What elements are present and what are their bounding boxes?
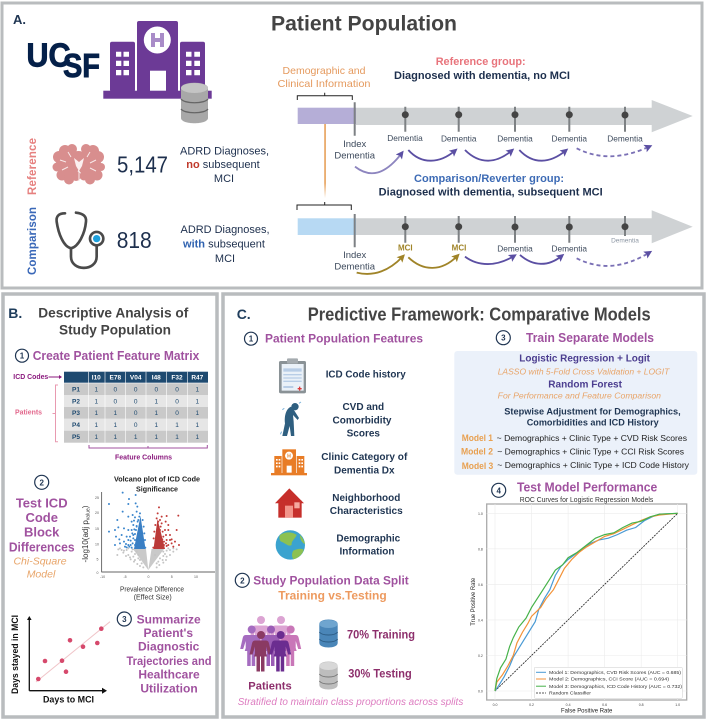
step 3 badge bbox=[117, 612, 131, 626]
heading: summarize trajectories: Patient's bbox=[144, 626, 193, 640]
text: ICD code history: ICD Code history bbox=[326, 369, 406, 380]
heading: reference group: Reference group: bbox=[436, 56, 526, 68]
timeline: reference: Dementia bbox=[552, 134, 587, 144]
section 1 badge: 1 bbox=[249, 335, 254, 344]
timeline: comparison: Index bbox=[343, 250, 367, 261]
chart: volcano plot: -5 bbox=[124, 575, 127, 579]
chart: volcano plot: 10 bbox=[194, 575, 198, 579]
table: patient feature matrix: P3 bbox=[72, 410, 80, 417]
chart: ROC curves: 1.0 bbox=[478, 512, 483, 516]
chart: volcano plot: ) bbox=[81, 505, 90, 508]
text: ADRD with MCI bbox=[180, 224, 270, 265]
step 2 badge bbox=[35, 475, 49, 489]
panel C: predictive framework bbox=[223, 294, 704, 717]
chart: ROC curves: 0.0 bbox=[493, 703, 497, 707]
chart: ROC curves: 0.4 bbox=[566, 703, 571, 707]
text: ADRD with MCI: ADRD Diagnoses, bbox=[180, 224, 270, 236]
chart: ROC curves: 0.8 bbox=[478, 547, 483, 551]
heading: summarize trajectories bbox=[126, 612, 212, 696]
section 1 badge bbox=[244, 332, 258, 345]
table: patient feature matrix: P2 bbox=[72, 398, 80, 405]
heading: descriptive analysis: Descriptive Analysis of bbox=[38, 304, 189, 320]
table: patient feature matrix: 1 bbox=[113, 434, 117, 441]
timeline: reference: Dementia bbox=[387, 133, 423, 143]
arrows: comparison group visits bbox=[357, 253, 649, 274]
icon: clipboard bbox=[279, 358, 306, 393]
table: patient feature matrix: 0 bbox=[113, 386, 117, 394]
heading: reference group: Diagnosed with dementia, no MCI bbox=[394, 70, 570, 82]
table: patient feature matrix: 1 bbox=[94, 422, 98, 429]
heading: summarize trajectories: Summarize bbox=[137, 612, 201, 626]
chart: ROC curves: True Positive Rate bbox=[470, 577, 477, 626]
chart: volcano plot: 5 bbox=[96, 558, 98, 562]
table: patient feature matrix: 1 bbox=[195, 386, 199, 394]
text: neighborhood characteristics: Neighborhood bbox=[332, 493, 400, 504]
text: clinic category: Dementia Dx bbox=[334, 465, 395, 476]
text: CVD and comorbidity scores: Comorbidity bbox=[332, 415, 392, 426]
table: patient feature matrix: 0 bbox=[175, 386, 179, 394]
section 4 badge: 4 bbox=[496, 486, 501, 495]
table: patient feature matrix: 1 bbox=[154, 398, 158, 405]
icon: patients group bbox=[240, 616, 301, 672]
icon: house bbox=[275, 488, 304, 518]
panel B: descriptive analysis bbox=[3, 294, 217, 717]
table: patient feature matrix: 1 bbox=[195, 398, 199, 405]
chart: volcano plot: 5 bbox=[171, 575, 173, 579]
chart: ROC curves: Model 2: Demographics, CCI Score (AUC = 0.694) bbox=[549, 677, 669, 683]
icon: clinic building bbox=[271, 449, 307, 475]
heading: test ICD code block differences: Test ICD bbox=[16, 495, 68, 510]
label: Reference: Reference bbox=[27, 138, 39, 195]
text: 70% training: 70% Training bbox=[347, 627, 415, 641]
note: stratified: Stratified to maintain class proportions across splits bbox=[238, 697, 463, 708]
table: patient feature matrix: I48 bbox=[152, 375, 161, 382]
chart: ROC curves: Model 1: Demographics, CVD Risk Scores (AUC = 0.685) bbox=[549, 670, 681, 676]
chart: volcano plot: 0 bbox=[148, 575, 150, 579]
table: patient feature matrix: 1 bbox=[154, 422, 158, 429]
chart: volcano plot: Prevalence Difference bbox=[120, 587, 184, 594]
step 1 badge bbox=[16, 349, 28, 362]
timeline: reference: Dementia bbox=[441, 134, 477, 144]
chart: volcano plot: 15 bbox=[95, 527, 99, 531]
chart: volcano plot: Volcano plot of ICD Code bbox=[114, 477, 200, 484]
icon: database blue bbox=[319, 620, 338, 648]
panel: model definitions: ~ Demographics + Clinic Type + ICD Code History bbox=[497, 460, 690, 470]
table: patient feature matrix: R47 bbox=[191, 375, 204, 382]
heading: test ICD code block differences: Code bbox=[25, 510, 58, 525]
panel B label: B. bbox=[8, 305, 22, 321]
chart: ROC curves: Random Classifier bbox=[549, 691, 591, 697]
heading: patient population features: Patient Population Features bbox=[265, 332, 423, 346]
chart: ROC curves: 1.0 bbox=[675, 703, 680, 707]
text: ADRD no MCI bbox=[180, 145, 269, 185]
panel: model definitions: ~ Demographics + Clinic Type + CVD Risk Scores bbox=[497, 433, 687, 443]
text: demographic information: Demographic bbox=[336, 533, 401, 544]
heading: study population data split: Training vs.Testing bbox=[278, 588, 387, 602]
text: ADRD with MCI: MCI bbox=[215, 253, 235, 265]
chart: volcano plot: 10 bbox=[95, 542, 99, 546]
heading: test ICD code block differences bbox=[9, 495, 75, 554]
timeline: reference bbox=[298, 100, 693, 162]
label: feature columns brace: Feature Columns bbox=[115, 454, 172, 461]
chart: ROC curves: 0.6 bbox=[602, 703, 607, 707]
text: CVD and comorbidity scores: Scores bbox=[347, 429, 380, 440]
text: clinic category bbox=[321, 452, 408, 476]
label: ICD codes: ICD Codes bbox=[13, 374, 48, 381]
table: patient feature matrix bbox=[64, 372, 208, 443]
table: patient feature matrix: E78 bbox=[110, 375, 121, 382]
text: CVD and comorbidity scores bbox=[332, 402, 392, 440]
text: demographic information: Information bbox=[340, 547, 394, 558]
text: ADRD no MCI: MCI bbox=[214, 173, 234, 185]
text: ADRD no MCI: ADRD Diagnoses, bbox=[180, 145, 269, 157]
table: patient feature matrix: 1 bbox=[195, 434, 199, 441]
panel A: patient population bbox=[2, 3, 702, 288]
chart: volcano plot: Significance bbox=[136, 487, 178, 494]
timeline: reference: Dementia bbox=[497, 134, 533, 144]
section 4 badge bbox=[492, 483, 506, 497]
heading: reference group bbox=[394, 56, 570, 82]
UCSF logo: SF bbox=[63, 47, 100, 84]
table: patient feature matrix: 1 bbox=[154, 410, 158, 417]
panel: model definitions: For Performance and Feature Comparison bbox=[498, 391, 661, 401]
chart: volcano plot: -10 bbox=[100, 575, 105, 579]
chart: days scatter: Days to MCI bbox=[43, 695, 94, 706]
heading: comparison group bbox=[379, 173, 603, 199]
heading: summarize trajectories: Healthcare bbox=[138, 668, 200, 682]
text: ADRD with MCI: with subsequent bbox=[182, 238, 265, 250]
timeline: comparison: Dementia bbox=[497, 244, 533, 254]
icon: hunched person bbox=[280, 402, 301, 436]
chart: volcano plot: -log10(adj p bbox=[81, 520, 90, 562]
chart: ROC curves: 0.8 bbox=[639, 703, 644, 707]
chart: volcano plot: (Effect Size) bbox=[134, 594, 172, 601]
panel: model definitions: Random Forest bbox=[548, 379, 622, 391]
panel: model definitions: Logistic Regression + Logit bbox=[519, 352, 650, 364]
text: neighborhood characteristics: Characteristics bbox=[330, 506, 403, 517]
timeline: comparison: Dementia bbox=[334, 262, 376, 273]
panel C label: C. bbox=[237, 306, 251, 322]
timeline: reference: Index bbox=[343, 139, 367, 150]
panel: model definitions: Comorbidities and ICD History bbox=[527, 417, 659, 428]
table: patient feature matrix: 0 bbox=[154, 386, 158, 394]
arrows: reference group visits bbox=[355, 147, 649, 173]
panel: model definitions: LASSO with 5-Fold Cross Validation + LOGIT bbox=[498, 366, 670, 376]
text: chi-square model bbox=[13, 555, 67, 580]
text: 30% testing: 30% Testing bbox=[348, 666, 412, 680]
label: patients brace: Patients bbox=[15, 410, 42, 417]
panel: model definitions bbox=[454, 351, 697, 475]
heading: study population data split: Study Population Data Split bbox=[253, 573, 409, 587]
text: ADRD no MCI: no subsequent bbox=[186, 159, 260, 171]
section 3 badge: 3 bbox=[501, 334, 506, 343]
text: CVD and comorbidity scores: CVD and bbox=[342, 402, 384, 413]
table: patient feature matrix: 0 bbox=[134, 398, 138, 405]
heading: comparison group: Comparison/Reverter group: bbox=[414, 173, 564, 185]
heading: summarize trajectories: Utilization bbox=[140, 682, 198, 696]
label: demographic and clinical information bbox=[278, 65, 371, 90]
icon: brain bbox=[52, 144, 105, 184]
step 1 badge: 1 bbox=[20, 352, 25, 361]
heading: study population data split bbox=[253, 573, 409, 602]
timeline: reference: Dementia bbox=[334, 150, 376, 162]
icon: hospital bbox=[103, 21, 212, 99]
chart: ROC curves: 0.2 bbox=[478, 654, 483, 658]
table: patient feature matrix: 0 bbox=[134, 386, 138, 394]
icon: database bbox=[181, 83, 208, 123]
label: patients: Patients bbox=[248, 680, 292, 692]
panel: model definitions: Model 3 bbox=[462, 461, 493, 471]
title: predictive framework: Predictive Framework: Comparative Models bbox=[308, 305, 651, 325]
table: patient feature matrix: 0 bbox=[175, 410, 179, 417]
label: demographic and clinical information: Demographic and bbox=[282, 65, 366, 77]
table: patient feature matrix: I10 bbox=[92, 375, 101, 382]
chart: ROC curves: 0.2 bbox=[529, 703, 534, 707]
panel: model definitions: Stepwise Adjustment for Demographics, bbox=[504, 406, 681, 417]
UCSF logo bbox=[26, 36, 100, 84]
text: clinic category: Clinic Category of bbox=[321, 452, 408, 463]
count: 818: 818 bbox=[117, 227, 152, 253]
chart: days scatter bbox=[10, 615, 110, 706]
table: patient feature matrix: 0 bbox=[134, 422, 138, 429]
bracket: top bbox=[297, 93, 352, 100]
chart: volcano plot: 0 bbox=[96, 571, 98, 575]
step 3 badge: 3 bbox=[122, 615, 127, 624]
table: patient feature matrix: F32 bbox=[171, 375, 183, 382]
chart: volcano plot: value bbox=[86, 508, 92, 520]
table: patient feature matrix: P5 bbox=[72, 434, 80, 441]
heading: descriptive analysis bbox=[38, 304, 189, 337]
label: patients brace bbox=[15, 385, 58, 442]
section 2 badge bbox=[235, 573, 249, 587]
connector: orange line bbox=[324, 124, 326, 198]
heading: summarize trajectories: Trajectories and bbox=[126, 654, 212, 668]
table: patient feature matrix: 1 bbox=[195, 422, 199, 429]
text: neighborhood characteristics bbox=[330, 493, 403, 517]
panel A label: A. bbox=[13, 12, 26, 27]
chart: volcano plot: 20 bbox=[95, 511, 99, 515]
chart: ROC curves: Model 3: Demographics, ICD Code History (AUC = 0.732) bbox=[549, 684, 682, 690]
timeline: comparison: Dementia bbox=[611, 237, 639, 244]
timeline: comparison: MCI bbox=[452, 244, 466, 253]
chart: ROC curves: ROC Curves for Logistic Regression Models bbox=[520, 497, 654, 504]
table: patient feature matrix: 0 bbox=[175, 398, 179, 405]
table: patient feature matrix: 1 bbox=[154, 434, 158, 441]
icon: stethoscope bbox=[57, 213, 103, 268]
chart: ROC curves: False Positive Rate bbox=[561, 708, 613, 715]
table: patient feature matrix: V04 bbox=[130, 375, 142, 382]
title: Patient Population: Patient Population bbox=[271, 12, 457, 36]
table: patient feature matrix: 1 bbox=[134, 434, 138, 441]
table: patient feature matrix: 0 bbox=[113, 398, 117, 405]
icon: database gray bbox=[319, 662, 338, 690]
table: patient feature matrix: 1 bbox=[94, 410, 98, 417]
text: chi-square model: Chi-Square bbox=[13, 555, 67, 567]
step 2 badge: 2 bbox=[39, 478, 44, 487]
heading: test ICD code block differences: Block bbox=[24, 525, 60, 540]
label: Comparison: Comparison bbox=[27, 207, 39, 275]
table: patient feature matrix: 0 bbox=[134, 410, 138, 417]
label: demographic and clinical information: Clinical Information bbox=[278, 78, 371, 90]
heading: summarize trajectories: Diagnostic bbox=[138, 640, 200, 654]
text: demographic information bbox=[336, 533, 401, 558]
panel: model definitions: ~ Demographics + Clinic Type + CCI Risk Scores bbox=[497, 447, 684, 457]
label: feature columns brace bbox=[89, 445, 207, 461]
heading: test model performance: Test Model Performance bbox=[517, 480, 657, 495]
count: 5,147: 5,147 bbox=[117, 152, 168, 178]
table: patient feature matrix: P4 bbox=[72, 422, 80, 429]
section 2 badge: 2 bbox=[240, 576, 245, 585]
timeline: comparison: MCI bbox=[398, 244, 413, 253]
chart: ROC curves: 0.0 bbox=[478, 690, 483, 694]
section 3 badge bbox=[496, 331, 510, 345]
heading: comparison group: Diagnosed with dementia, subsequent MCI bbox=[379, 187, 603, 199]
timeline: comparison: Dementia bbox=[552, 244, 587, 254]
table: patient feature matrix: 1 bbox=[195, 410, 199, 417]
chart: days scatter: Days stayed in MCI bbox=[10, 615, 21, 694]
table: patient feature matrix: 1 bbox=[94, 434, 98, 441]
chart: ROC curves: 0.6 bbox=[478, 583, 483, 587]
heading: test ICD code block differences: Differences bbox=[9, 539, 75, 554]
timeline: reference: Dementia bbox=[607, 134, 643, 144]
table: patient feature matrix: 1 bbox=[175, 434, 179, 441]
heading: create patient feature matrix: Create Patient Feature Matrix bbox=[33, 349, 199, 363]
bracket: bottom bbox=[297, 202, 351, 210]
timeline: comparison bbox=[298, 210, 693, 273]
table: patient feature matrix: 1 bbox=[94, 386, 98, 394]
chart: volcano plot: 25 bbox=[95, 496, 99, 500]
icon: globe bbox=[276, 530, 305, 560]
table: patient feature matrix: 1 bbox=[113, 410, 117, 417]
heading: train separate models: Train Separate Models bbox=[526, 331, 654, 345]
heading: descriptive analysis: Study Population bbox=[59, 321, 171, 337]
table: patient feature matrix: 1 bbox=[94, 398, 98, 405]
text: chi-square model: Model bbox=[27, 568, 56, 580]
chart: ROC curves: 0.4 bbox=[478, 618, 483, 622]
panel: model definitions: Model 2 bbox=[461, 447, 493, 457]
panel: model definitions: Model 1 bbox=[462, 433, 493, 443]
table: patient feature matrix: 1 bbox=[113, 422, 117, 429]
chart: volcano plot bbox=[81, 477, 215, 601]
table: patient feature matrix: P1 bbox=[72, 386, 80, 394]
UCSF logo: UC bbox=[26, 36, 70, 74]
chart: ROC curves bbox=[470, 497, 687, 715]
table: patient feature matrix: 1 bbox=[175, 422, 179, 429]
